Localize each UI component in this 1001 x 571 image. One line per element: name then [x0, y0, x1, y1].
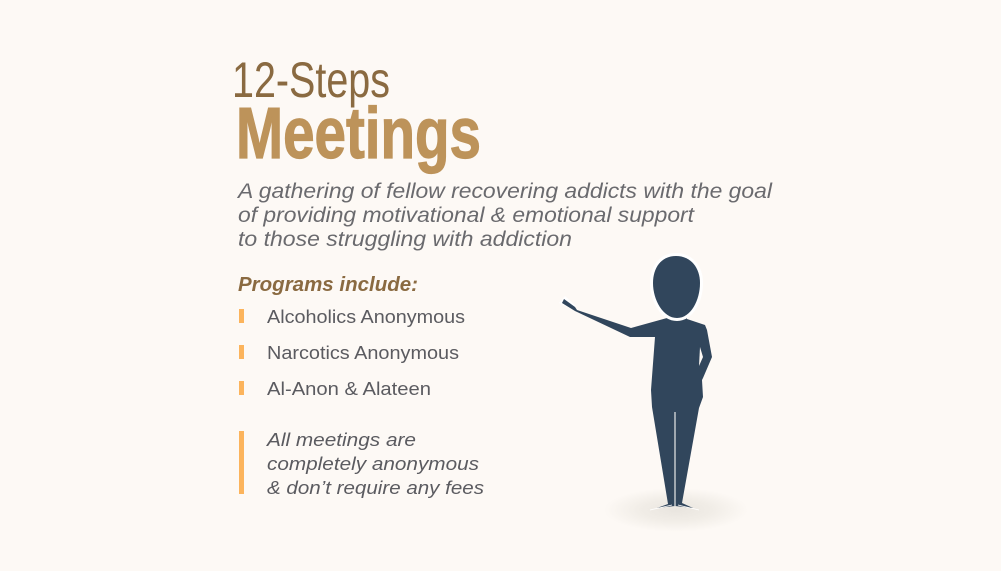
callout: anonymous note: completely anonymous	[267, 453, 479, 474]
bullet: narcotics anonymous	[239, 345, 244, 359]
bullet: alcoholics anonymous	[239, 309, 244, 323]
leg gap	[674, 412, 676, 506]
title: Meetings	[236, 94, 481, 174]
arm gap	[699, 347, 703, 366]
list: programs: Narcotics Anonymous	[267, 342, 459, 363]
bullet: al-anon	[239, 381, 244, 395]
description: A gathering of fellow recovering addicts with the goal	[236, 179, 773, 203]
description: of providing motivational & emotional support	[238, 203, 695, 227]
figure: presenter	[559, 256, 748, 532]
heading: programs include: Programs include:	[238, 274, 418, 296]
head	[653, 256, 700, 318]
list: programs: Alcoholics Anonymous	[267, 306, 465, 327]
callout: anonymous note: All meetings are	[266, 429, 416, 450]
floor shadow	[604, 488, 748, 532]
hand halo	[559, 296, 576, 309]
list: programs: Al-Anon & Alateen	[267, 378, 431, 399]
description	[236, 179, 773, 251]
body	[562, 299, 712, 508]
list: programs	[239, 306, 465, 399]
title: 12-Steps	[232, 52, 390, 108]
foot highlights	[650, 505, 699, 510]
description: to those struggling with addiction	[238, 227, 572, 251]
title	[232, 52, 481, 174]
callout: anonymous note	[239, 429, 484, 498]
callout: anonymous note: & don’t require any fees	[267, 477, 484, 498]
